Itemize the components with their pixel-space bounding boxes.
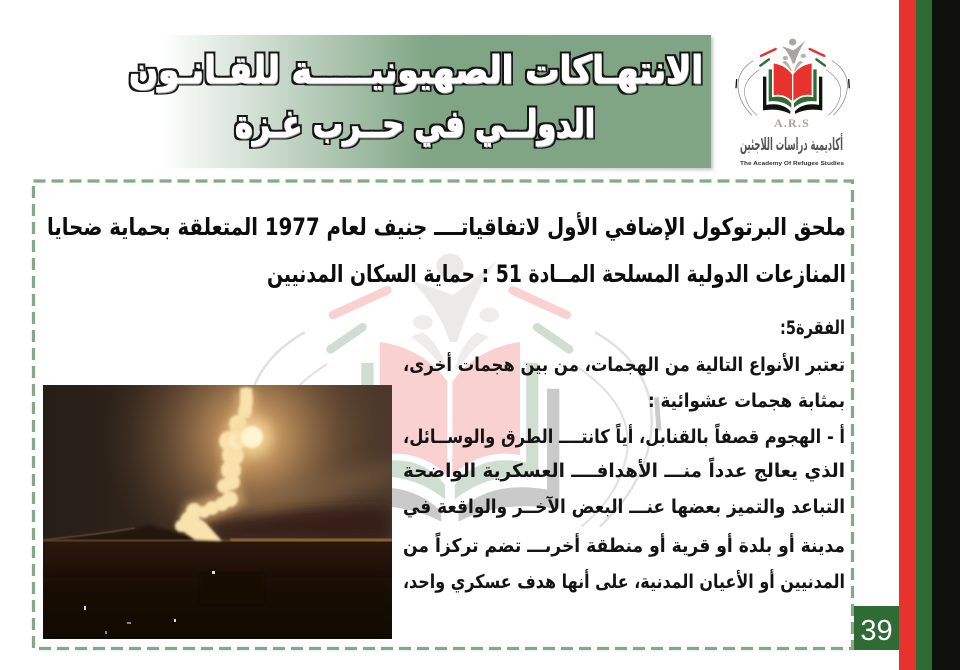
body text: أ - الهجوم قصفاً بالقنابل، أياً كانتــــ الطرق والوســائل،	[403, 423, 845, 448]
body text: تعتبر الأنواع التالية من الهجمات، من بين هجمات أخرى،	[403, 352, 845, 376]
logo initials: A.R.S	[774, 116, 810, 130]
dashed content frame	[34, 181, 852, 648]
body text	[403, 317, 845, 594]
body text: الذي يعالج عدداً منـــ الأهدافــــ العسكرية الواضحة	[403, 457, 845, 483]
body text: التباعد والتميز بعضها عنـــ البعض الآخــر والواقعة في	[403, 495, 845, 518]
smoke plume	[188, 390, 246, 530]
body text: الفقرة5:	[780, 317, 845, 339]
side stripes: red, green, black	[899, 0, 960, 670]
lights	[84, 571, 215, 634]
page number box: 39	[860, 615, 893, 647]
title banner	[129, 35, 713, 170]
body text: مدينة أو بلدة أو قرية أو منطقة أخرىـــ تضم تركزاً من	[403, 532, 845, 557]
title text: الدولــي في حــرب غـزة	[235, 102, 595, 147]
fireball	[232, 417, 272, 457]
photo: night explosion over Gaza	[43, 385, 410, 639]
logo: Academy of Refugee Studies: أكاديمية دراسات اللاجئين	[740, 133, 843, 155]
title text: الانتهـاكات الصهيونيـــــة للقـانـون	[129, 48, 703, 92]
body text: بمثابة هجمات عشوائية :	[648, 390, 845, 412]
watermark: faded academy logo	[241, 253, 659, 526]
page number box	[854, 606, 899, 650]
heading	[47, 212, 846, 288]
heading: ملحق البرتوكول الإضافي الأول لاتفاقياتــــ جنيف لعام 1977 المتعلقة بحماية ضحايا	[47, 212, 846, 241]
title text	[129, 48, 703, 147]
heading: المنازعات الدولية المسلحة المــادة 51 : حماية السكان المدنيين	[267, 260, 846, 288]
logo english name: The Academy Of Refugee Studies	[740, 161, 844, 167]
body text: المدنيين أو الأعيان المدنية، على أنها هدف عسكري واحد،	[403, 569, 845, 594]
logo: Academy of Refugee Studies	[736, 39, 849, 167]
